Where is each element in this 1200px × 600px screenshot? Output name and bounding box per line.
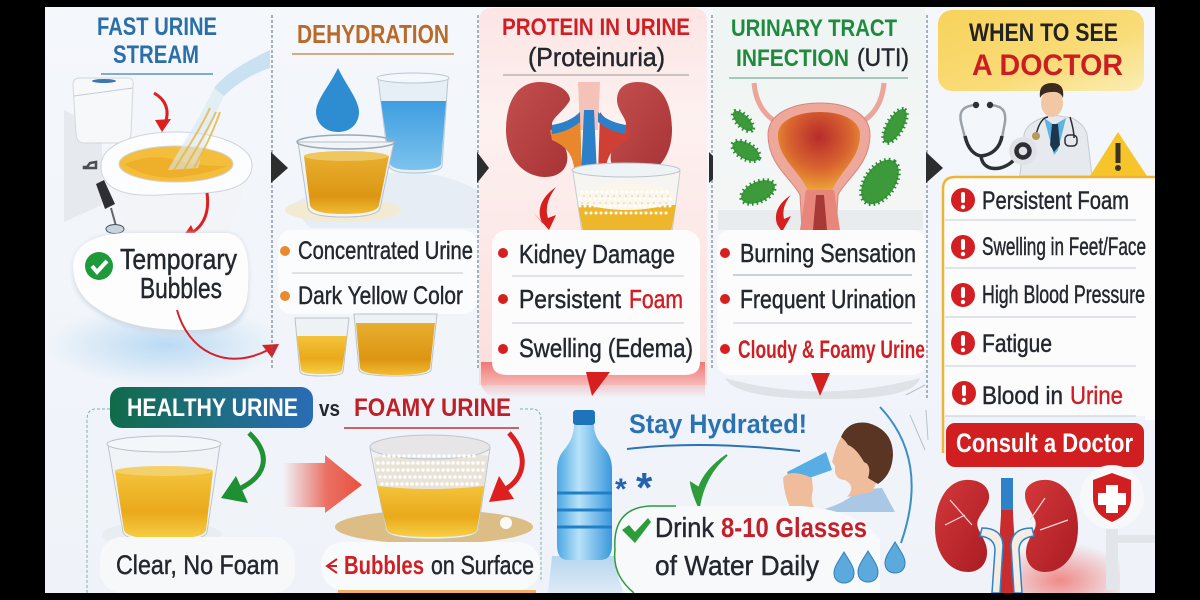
blue arc (880, 407, 912, 543)
text: dark yellow color: Dark Yellow Color (298, 282, 463, 310)
text: persistent foam: Persistent (519, 284, 622, 314)
heading underline (503, 74, 689, 76)
heading: fast urine stream: STREAM (113, 41, 199, 69)
arrowhead (221, 476, 248, 503)
panel: stay hydrated (548, 385, 928, 593)
heading box (938, 10, 1144, 91)
row: swelling (951, 233, 1146, 261)
icon: urine stream (168, 50, 270, 170)
bullet (498, 248, 508, 258)
icon: small glass (295, 318, 349, 376)
arrow: down marker (586, 372, 610, 396)
icon: water drops (834, 542, 905, 583)
callout: bubbles on surface (321, 542, 540, 590)
arrow: big red (283, 455, 362, 513)
icon: doctor (1020, 83, 1092, 176)
text: kidney damage: Kidney Damage (519, 239, 675, 269)
arrowhead (262, 344, 279, 358)
row: fatigue: Fatigue (982, 330, 1052, 358)
panel: dehydration (278, 19, 477, 376)
heading: foamy urine: FOAMY URINE (354, 394, 511, 422)
bullet (720, 248, 730, 258)
dashed divider (711, 15, 713, 370)
dashed green frame (87, 409, 541, 593)
heading: UTI (731, 15, 909, 72)
bullet (498, 294, 508, 304)
panel background (479, 8, 707, 385)
decorative backdrop (1000, 530, 1120, 593)
text: concentrated urine: Concentrated Urine (298, 237, 473, 265)
arrow: down (533, 187, 556, 230)
bullet (280, 291, 290, 301)
heading: stay hydrated: Stay Hydrated! (629, 409, 807, 439)
arrow: bowl to bubbles (188, 193, 208, 235)
list box (492, 230, 700, 375)
text: persistent foam: Foam (629, 284, 683, 314)
bullet (720, 294, 730, 304)
heading: UTI: (UTI) (857, 44, 909, 72)
row: blood in urine: Blood in (982, 382, 1063, 410)
heading underline (729, 77, 908, 79)
arrowhead (489, 476, 514, 502)
arrow: green (232, 433, 263, 492)
heading underline (292, 53, 454, 55)
panel: urinary tract infection (713, 8, 926, 399)
text: drink 8-10 glasses: Drink (655, 512, 715, 543)
heading: dehydration: DEHYDRATION (297, 19, 449, 49)
heading underline (101, 73, 213, 75)
arrow: red (502, 433, 522, 491)
heading: protein in urine: PROTEIN IN URINE (502, 14, 690, 41)
arrowhead (155, 119, 171, 132)
icon: healthy kidneys (935, 478, 1078, 593)
row: blood in urine: Urine (1070, 382, 1123, 410)
heading: UTI: URINARY TRACT (731, 15, 897, 42)
icon: foamy glass (572, 163, 680, 232)
bacteria (729, 106, 911, 211)
bubble (500, 517, 512, 529)
check mark (691, 455, 727, 507)
panel: protein in urine (479, 8, 707, 398)
arrow: down (771, 195, 791, 232)
dashed divider (926, 15, 928, 400)
heading: when to see: WHEN TO SEE (969, 19, 1118, 47)
text: cloudy & foamy urine: Cloudy & Foamy Urine (738, 336, 925, 364)
curved underline arrow (627, 445, 800, 451)
icon: dark glass (354, 314, 437, 376)
dashed divider (271, 15, 273, 370)
text: temporary bubbles: Temporary (120, 244, 237, 276)
icon: bladder (754, 83, 884, 230)
row: persistent foam: Persistent Foam (982, 187, 1129, 215)
bullet (498, 344, 508, 354)
red glow (481, 362, 705, 398)
counter band (718, 210, 923, 230)
heading: a doctor: A DOCTOR (972, 49, 1123, 82)
bullet (720, 344, 730, 354)
callout: bubbles on surface: Bubbles (344, 550, 424, 580)
icon: toilet (73, 78, 252, 240)
icon: water bottle (557, 410, 612, 560)
support post and plate (1106, 525, 1155, 590)
arrowhead (179, 225, 198, 242)
text: temporary bubbles: Bubbles (140, 273, 222, 305)
callout: temporary bubbles (73, 233, 248, 334)
badge: healthy urine: HEALTHY URINE (127, 394, 298, 422)
callout: bubbles on surface: on Surface (431, 550, 534, 580)
list panel (943, 177, 1155, 453)
orange edge (338, 590, 536, 593)
callout: clear no foam (100, 537, 295, 593)
badge: healthy urine (110, 387, 313, 428)
list panel border (943, 177, 1155, 453)
shadow plate (725, 378, 920, 399)
text: of water daily: of Water Daily (655, 550, 819, 581)
row: high blood pressure (951, 281, 1145, 309)
callout: drink water (615, 506, 905, 593)
floor (290, 172, 477, 228)
text: vs: vs (319, 396, 340, 421)
row: persistent foam (951, 187, 1129, 215)
chevron (926, 152, 943, 183)
chevron (709, 152, 725, 183)
icon: kidneys (506, 82, 672, 177)
icon: green check (85, 252, 113, 280)
panel: healthy vs foamy (87, 387, 541, 593)
text: drink 8-10 glasses: 8-10 Glasses (721, 512, 867, 543)
panel: fast urine stream (47, 13, 283, 385)
sketch marks (906, 385, 928, 450)
icon: warning triangle (1090, 132, 1147, 176)
asterisk icons: * (636, 464, 653, 511)
panel background (713, 8, 925, 230)
white list band (278, 230, 477, 314)
arrow: to dehydration (177, 310, 268, 359)
asterisk icons (615, 464, 653, 511)
icon: green check (622, 518, 651, 543)
heading: fast urine stream (97, 13, 217, 69)
row: blood in urine (952, 381, 1123, 410)
floor glow (47, 305, 283, 385)
icon: puddle (335, 510, 533, 544)
chevron (477, 152, 489, 183)
icon: wall shadow (64, 110, 102, 222)
text: frequent urination: Frequent Urination (740, 284, 916, 314)
icon: clear urine cup (102, 436, 222, 549)
arrow: down marker (811, 373, 830, 396)
bullet (280, 246, 290, 256)
callout: clear no foam: Clear, No Foam (116, 550, 279, 580)
text: drink 8-10 glasses (655, 512, 867, 543)
asterisk icons: * (615, 473, 627, 506)
text: swelling: Swelling (Edema) (519, 333, 693, 363)
row: fatigue (951, 330, 1052, 358)
text: burning sensation: Burning Sensation (740, 238, 916, 268)
dashed divider (477, 15, 479, 370)
icon: stethoscope (960, 102, 1037, 168)
button: consult a doctor: Consult a Doctor (956, 428, 1133, 458)
icon: blue glass (377, 73, 449, 173)
icon: person drinking (783, 423, 895, 512)
text: temporary bubbles (120, 244, 237, 305)
heading underline (344, 427, 519, 429)
chevron (271, 152, 288, 183)
panel: when to see a doctor (935, 10, 1155, 593)
icon: water drop (316, 68, 359, 132)
arrow: into bowl (154, 93, 167, 124)
heading: UTI: INFECTION (736, 45, 849, 72)
icon: red cross shield (1080, 465, 1144, 529)
floor (548, 556, 622, 593)
list box lower edge (492, 355, 700, 375)
list box (717, 230, 926, 375)
button: consult a doctor (946, 423, 1144, 467)
subheading: proteinuria: (Proteinuria) (528, 42, 665, 72)
heading: fast urine stream: FAST URINE (97, 13, 217, 41)
icon: dark urine cup (285, 135, 401, 222)
icon: foamy cup (370, 435, 490, 539)
